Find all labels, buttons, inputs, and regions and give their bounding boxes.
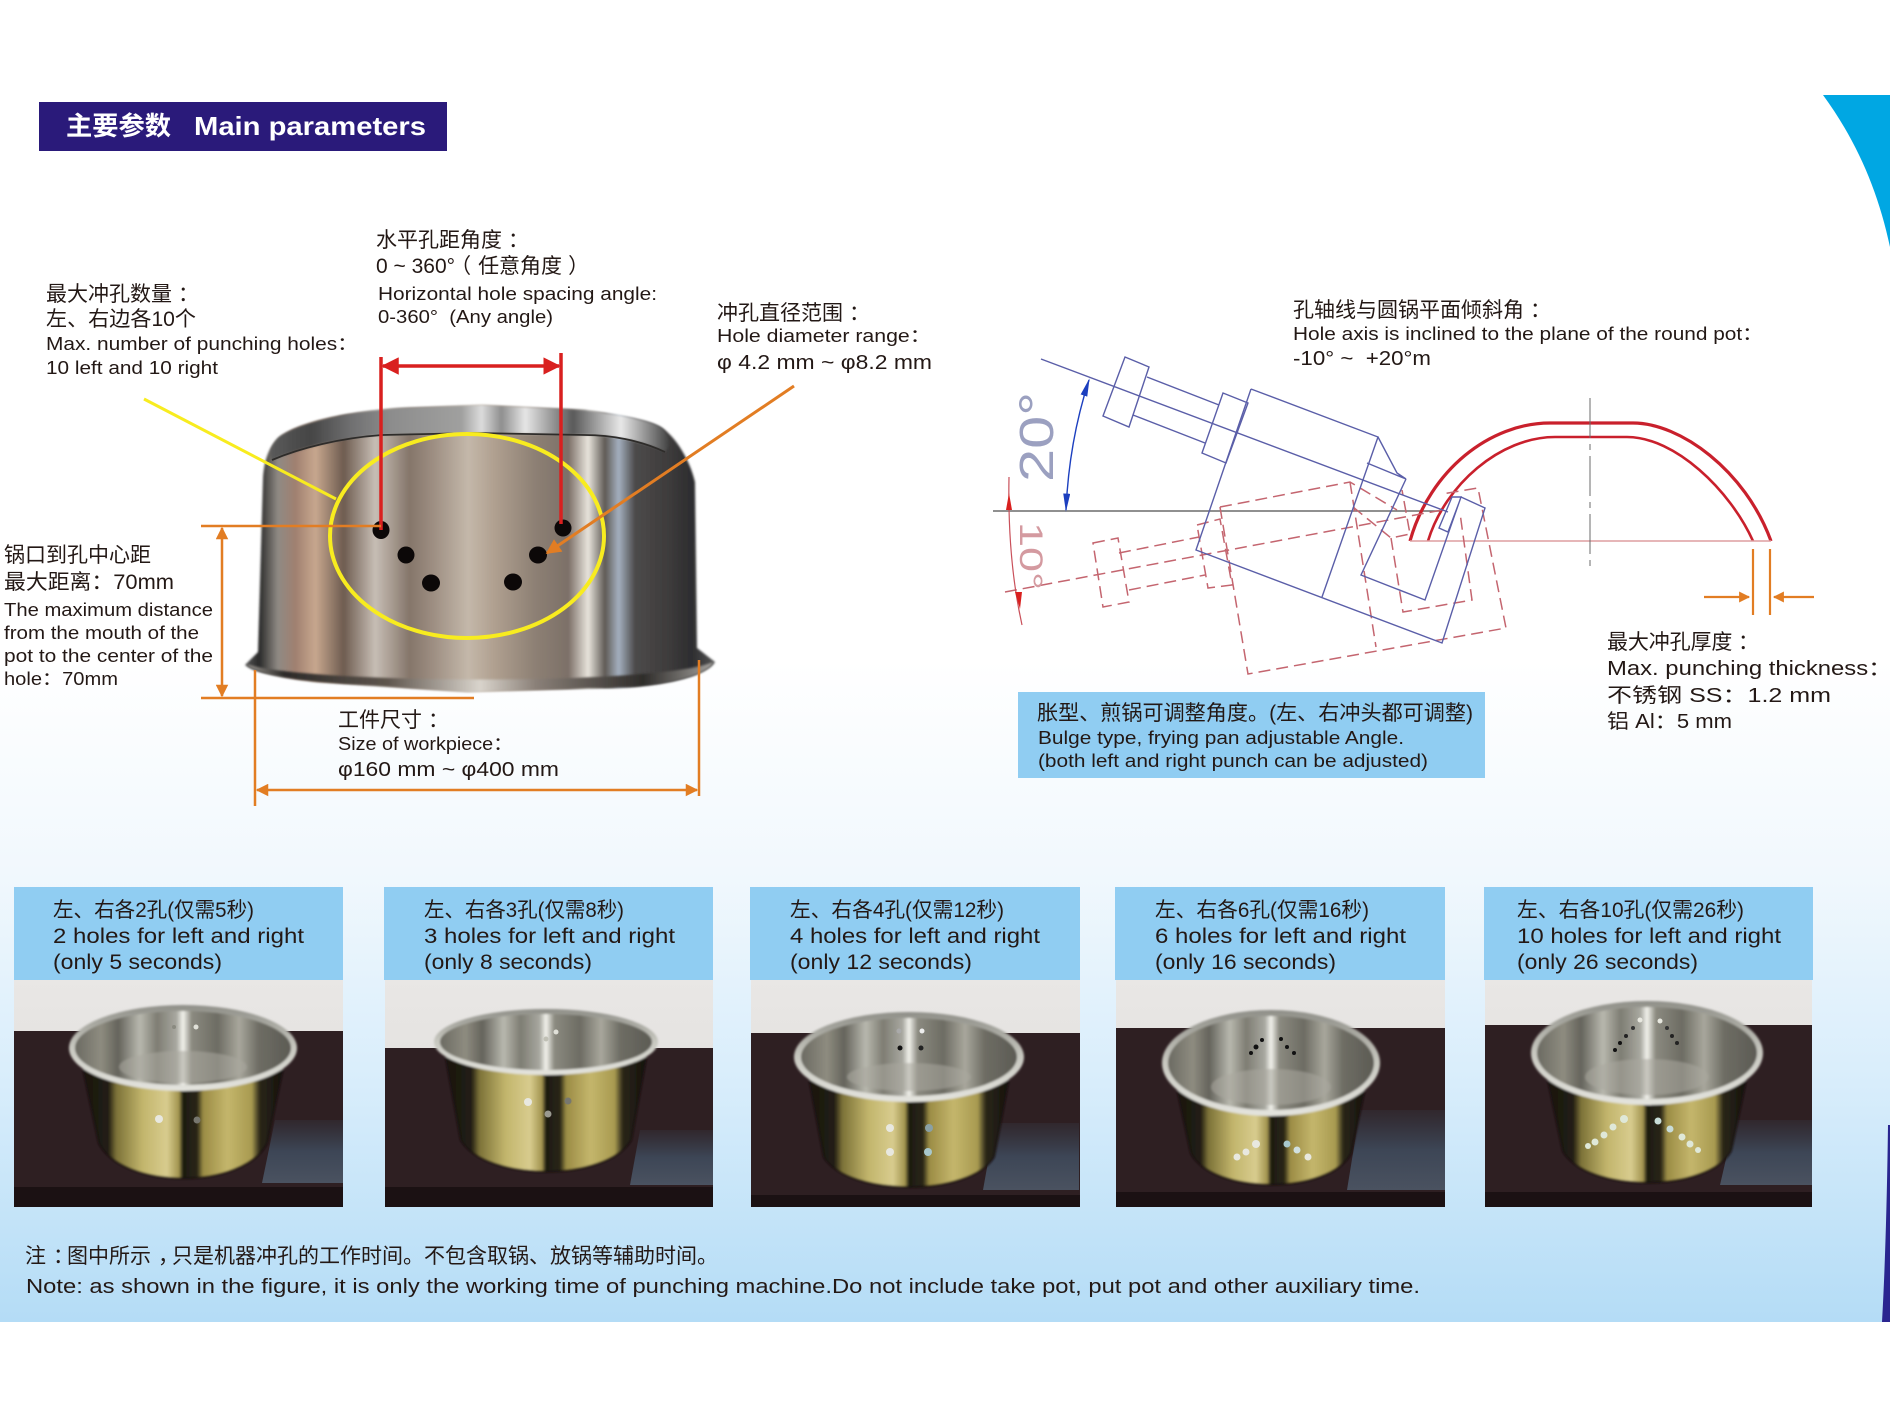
text: punching thickness bbox=[1607, 626, 1890, 734]
card heading: 左、右各4孔(仅需12秒) bbox=[790, 899, 1004, 922]
text: hole axis inclination bbox=[1293, 299, 1763, 370]
text: workpiece size: 工件尺寸 ： bbox=[338, 709, 449, 732]
footnote: 注 ：图中所示 ，只是机器冲孔的工作时间。不包含取锅、放锅等辅助时间。 bbox=[25, 1245, 718, 1268]
panel: example card 2 holes bbox=[14, 887, 343, 1207]
card heading bbox=[750, 887, 1080, 980]
pot illustration bbox=[245, 405, 715, 692]
panel: pot parameters bbox=[4, 229, 932, 806]
card heading: (only 5 seconds) bbox=[53, 951, 222, 974]
text: hole diameter range bbox=[717, 302, 932, 374]
text: punching thickness: 最大冲孔厚度 ： bbox=[1607, 626, 1759, 656]
label: 20 degrees: 20° bbox=[1011, 392, 1064, 482]
text: punching thickness: 不锈钢 SS ： 1.2 mm bbox=[1607, 679, 1831, 708]
callout: adjustable angle: Bulge type, frying pan adjustable Angle. bbox=[1038, 728, 1404, 748]
orange width dimension bbox=[255, 660, 699, 806]
panel: tilt diagram bbox=[993, 299, 1890, 778]
red arrowhead bottom bbox=[1015, 592, 1022, 609]
card heading: 10 holes for left and right bbox=[1517, 925, 1781, 948]
text: mouth to hole distance: 最大距离：70mm bbox=[4, 566, 174, 596]
panel: example card 6 holes bbox=[1115, 887, 1445, 1207]
red 10 degree arc bbox=[1009, 477, 1022, 625]
text: max number of holes: 最大冲孔数量 ： bbox=[46, 283, 199, 306]
text: hole spacing angle: 0-360° (Any angle) bbox=[378, 307, 553, 327]
text: hole spacing angle: 水平孔距角度 ： bbox=[376, 229, 529, 252]
card heading: 6 holes for left and right bbox=[1155, 925, 1406, 948]
right edge sliver bbox=[1882, 1125, 1890, 1322]
card heading: 4 holes for left and right bbox=[790, 925, 1040, 948]
text: mouth to hole distance bbox=[4, 544, 213, 691]
text: mouth to hole distance: 锅口到孔中心距 bbox=[4, 544, 151, 567]
blue 20 degree arc bbox=[1066, 380, 1089, 510]
panel: example card 10 holes bbox=[1484, 887, 1813, 1207]
blue punch at plus 20 degrees bbox=[1041, 357, 1485, 643]
title bar bbox=[39, 102, 447, 151]
yellow callout ring bbox=[144, 399, 604, 638]
card heading: 左、右各3孔(仅需8秒) bbox=[424, 899, 624, 922]
card heading: (only 8 seconds) bbox=[424, 951, 592, 974]
text: hole spacing angle: 0 ~ 360°（ 任意角度 ） bbox=[376, 255, 589, 278]
card heading: 2 holes for left and right bbox=[53, 925, 304, 948]
card heading: (only 12 seconds) bbox=[790, 951, 972, 974]
text: hole diameter range: φ 4.2 mm ~ φ8.2 mm bbox=[717, 352, 932, 374]
orange hole diameter arrow bbox=[547, 386, 794, 553]
text: punching thickness: Max. punching thickness ： bbox=[1607, 652, 1890, 681]
pot photo bbox=[1485, 980, 1812, 1207]
text: punching thickness: 铝 Al：5 mm bbox=[1607, 705, 1732, 734]
text: mouth to hole distance: The maximum distance bbox=[4, 600, 213, 620]
callout: adjustable angle bbox=[1018, 692, 1485, 778]
text: hole axis inclination: -10° ~ +20°m bbox=[1293, 348, 1431, 370]
card heading: (only 26 seconds) bbox=[1517, 951, 1698, 974]
text: hole diameter range: 冲孔直径范围 ： bbox=[717, 302, 870, 325]
label: 10 degrees: 10° bbox=[1013, 522, 1049, 590]
text: mouth to hole distance: pot to the center of the bbox=[4, 646, 213, 666]
text: max number of holes: Max. number of punching holes ： bbox=[46, 330, 358, 356]
text: max number of holes: 10 left and 10 right bbox=[46, 358, 218, 378]
card heading bbox=[1484, 887, 1813, 980]
text: hole axis inclination: 孔轴线与圆锅平面倾斜角 ： bbox=[1293, 299, 1551, 322]
card heading: 左、右各6孔(仅需16秒) bbox=[1155, 899, 1369, 922]
callout: adjustable angle: (both left and right punch can be adjusted) bbox=[1038, 751, 1428, 771]
text: mouth to hole distance: hole：70mm bbox=[4, 665, 118, 691]
callout: adjustable angle: 胀型、煎锅可调整角度。(左、右冲头都可调整) bbox=[1037, 702, 1473, 725]
card heading: 左、右各2孔(仅需5秒) bbox=[53, 899, 254, 922]
panel: example card 4 holes bbox=[750, 887, 1080, 1207]
pot photo bbox=[14, 980, 343, 1207]
red hole spacing dimension bbox=[381, 353, 561, 530]
card heading: 左、右各10孔(仅需26秒) bbox=[1517, 899, 1744, 922]
card heading bbox=[384, 887, 713, 980]
text: max number of holes bbox=[46, 283, 358, 378]
horizontal reference axis bbox=[993, 510, 1442, 512]
text: workpiece size: φ160 mm ~ φ400 mm bbox=[338, 759, 559, 781]
footnote bbox=[25, 1245, 1420, 1298]
card heading bbox=[1115, 887, 1445, 980]
pot photo bbox=[751, 980, 1080, 1207]
red dashed punch at minus 10 degrees bbox=[1005, 482, 1506, 674]
text: workpiece size bbox=[338, 709, 559, 781]
corner swoosh bbox=[1823, 95, 1890, 247]
round pot section bbox=[1410, 398, 1771, 568]
pot photo bbox=[1116, 980, 1445, 1207]
text: hole spacing angle: Horizontal hole spacing angle: bbox=[378, 284, 657, 304]
title bar: 主要参数 bbox=[66, 111, 171, 141]
red arrowhead top bbox=[1006, 493, 1012, 510]
card heading bbox=[14, 887, 343, 980]
text: hole axis inclination: Hole axis is inclined to the plane of the round pot ： bbox=[1293, 320, 1763, 346]
card heading: (only 16 seconds) bbox=[1155, 951, 1336, 974]
text: hole diameter range: Hole diameter range ： bbox=[717, 322, 931, 348]
thickness dimension bbox=[1704, 549, 1814, 615]
footnote: Note: as shown in the figure, it is only the working time of punching machine.Do not include take pot, put pot and other auxiliary time. bbox=[26, 1276, 1420, 1298]
orange height dimension bbox=[201, 526, 474, 698]
card heading: 3 holes for left and right bbox=[424, 925, 675, 948]
text: hole spacing angle bbox=[376, 229, 657, 327]
pot photo bbox=[385, 980, 713, 1207]
text: mouth to hole distance: from the mouth of the bbox=[4, 623, 199, 643]
text: workpiece size: Size of workpiece ： bbox=[338, 730, 513, 756]
panel: example card 3 holes bbox=[384, 887, 713, 1207]
text: max number of holes: 左、右边各10个 bbox=[46, 308, 196, 331]
title bar: Main parameters bbox=[194, 111, 426, 141]
